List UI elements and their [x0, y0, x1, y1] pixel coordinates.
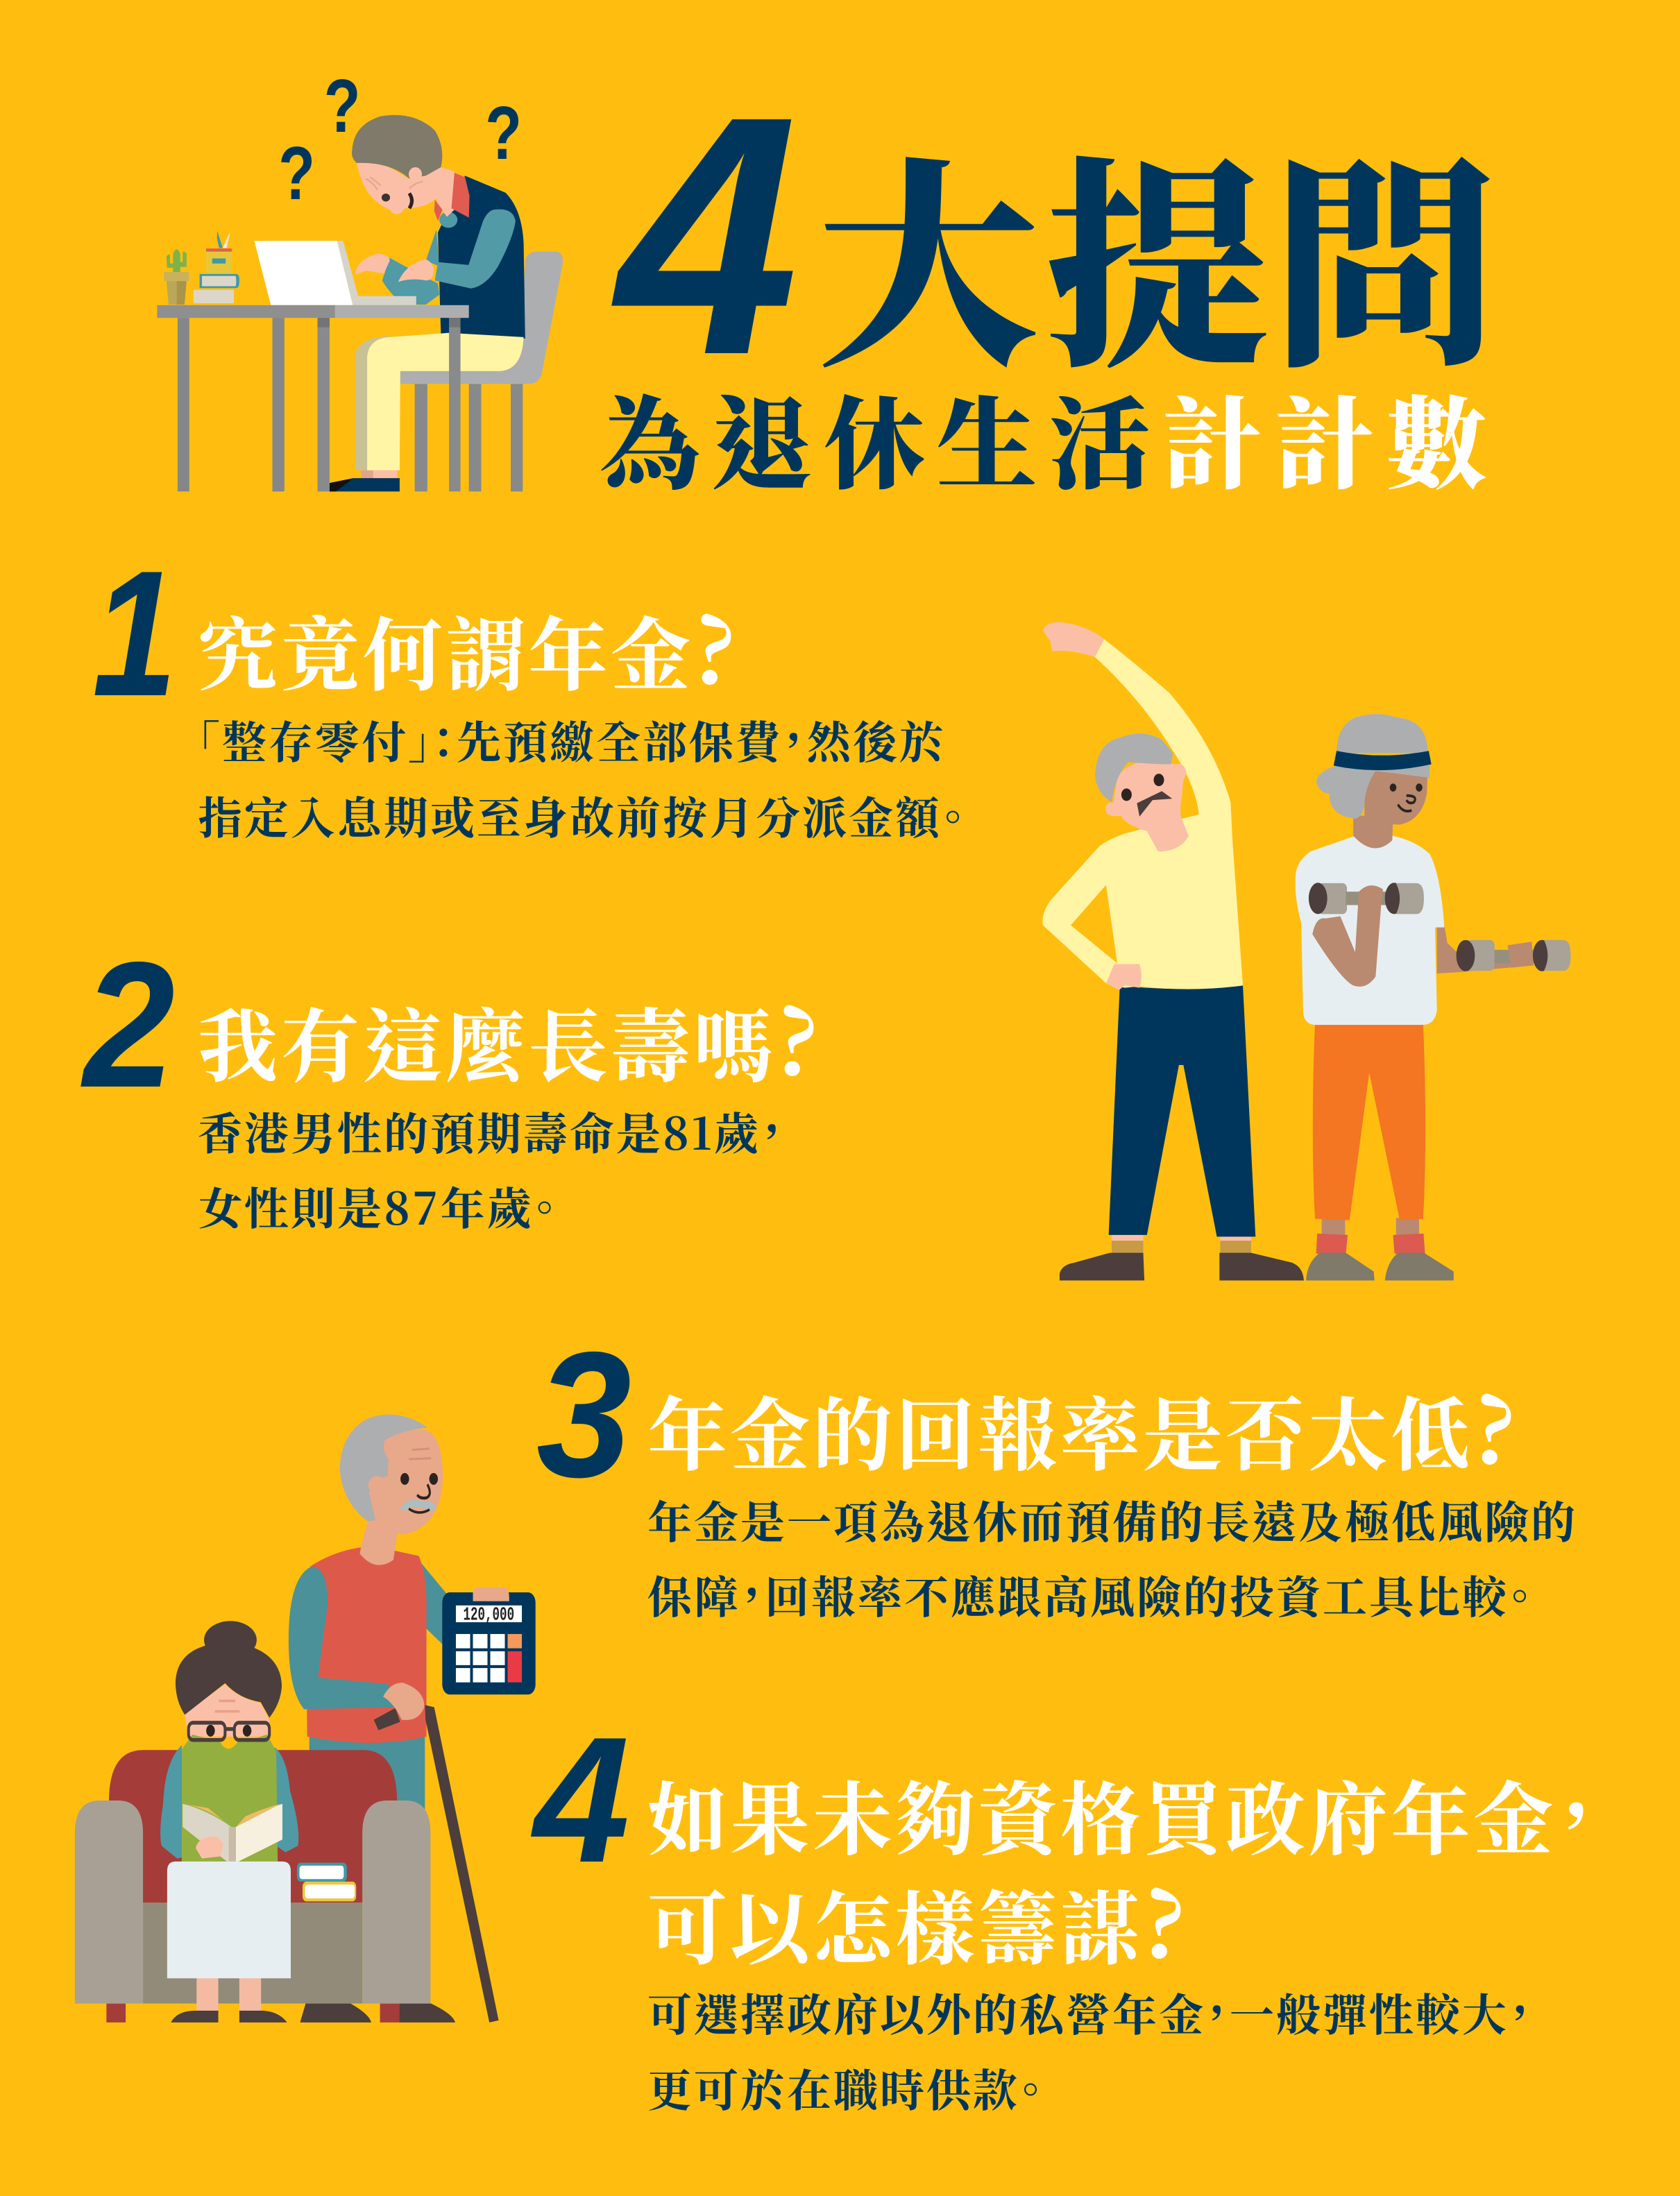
calculator: 120,000	[463, 1606, 514, 1626]
heading line 2: 可以怎樣籌謀?	[647, 1852, 1189, 1984]
icon: question marks: ?	[324, 64, 361, 148]
number 4: 4	[534, 1699, 629, 1900]
body text: 年金是一項為退休而預備的長遠及極低風險的	[647, 1488, 1577, 1551]
illustration: elderly couple with sofa and calculator	[75, 1414, 536, 2023]
icon: question marks	[278, 64, 522, 215]
older man standing	[289, 1415, 447, 1810]
heading: 年金的回報率是否太低?	[647, 1358, 1519, 1490]
body text line 2: 女性則是87年歲。	[198, 1174, 558, 1238]
man seated	[330, 115, 525, 491]
subtitle: 為退休生活計計數	[600, 365, 1499, 509]
title numeral 4: 4	[617, 45, 799, 425]
woman with dumbbells	[1296, 714, 1571, 1281]
title: 4大提問	[602, 45, 1502, 490]
heading: 究竟何謂年金?	[198, 578, 739, 710]
number 3: 3	[536, 1314, 631, 1515]
desk	[157, 305, 469, 491]
question 2	[80, 924, 822, 1238]
icon: question marks: ?	[485, 91, 522, 175]
man stretching	[1042, 622, 1304, 1281]
body text: 可選擇政府以外的私營年金，一般彈性較大，	[647, 1980, 1533, 2044]
man's shoes	[300, 2004, 455, 2023]
illustration: elderly couple exercising	[1042, 622, 1571, 1281]
body text line 2: 指定入息期或至身故前按月分派金額。	[198, 783, 966, 847]
icon: books and pencil holder	[194, 231, 239, 303]
heading line 1: 如果未夠資格買政府年金，	[647, 1756, 1599, 1871]
body text line 2: 更可於在職時供款。	[647, 2056, 1044, 2120]
number 1: 1	[92, 533, 177, 733]
chair	[400, 252, 563, 491]
laptop	[254, 241, 416, 305]
heading: 我有這麼長壽嗎?	[198, 969, 822, 1101]
question 4	[76, 1414, 1599, 2120]
sofa	[75, 1750, 430, 2023]
illustration: confused man at laptop	[157, 64, 563, 491]
title characters: 大提問	[817, 90, 1502, 410]
question 1	[92, 533, 966, 847]
question 3	[536, 1314, 1577, 1626]
icon: cactus and pot	[164, 249, 189, 305]
body text: 香港男性的預期壽命是81歲，	[198, 1099, 785, 1163]
icon: stacked books	[297, 1863, 356, 1901]
walking cane and hand	[374, 1683, 499, 2023]
older woman reading	[160, 1621, 298, 2023]
body text line 2: 保障，回報率不應跟高風險的投資工具比較。	[647, 1563, 1533, 1626]
number 2: 2	[83, 924, 175, 1125]
icon: question marks: ?	[278, 131, 315, 215]
body text: 「整存零付」：先預繳全部保費，然後於	[198, 708, 946, 772]
calculator	[442, 1588, 536, 1694]
